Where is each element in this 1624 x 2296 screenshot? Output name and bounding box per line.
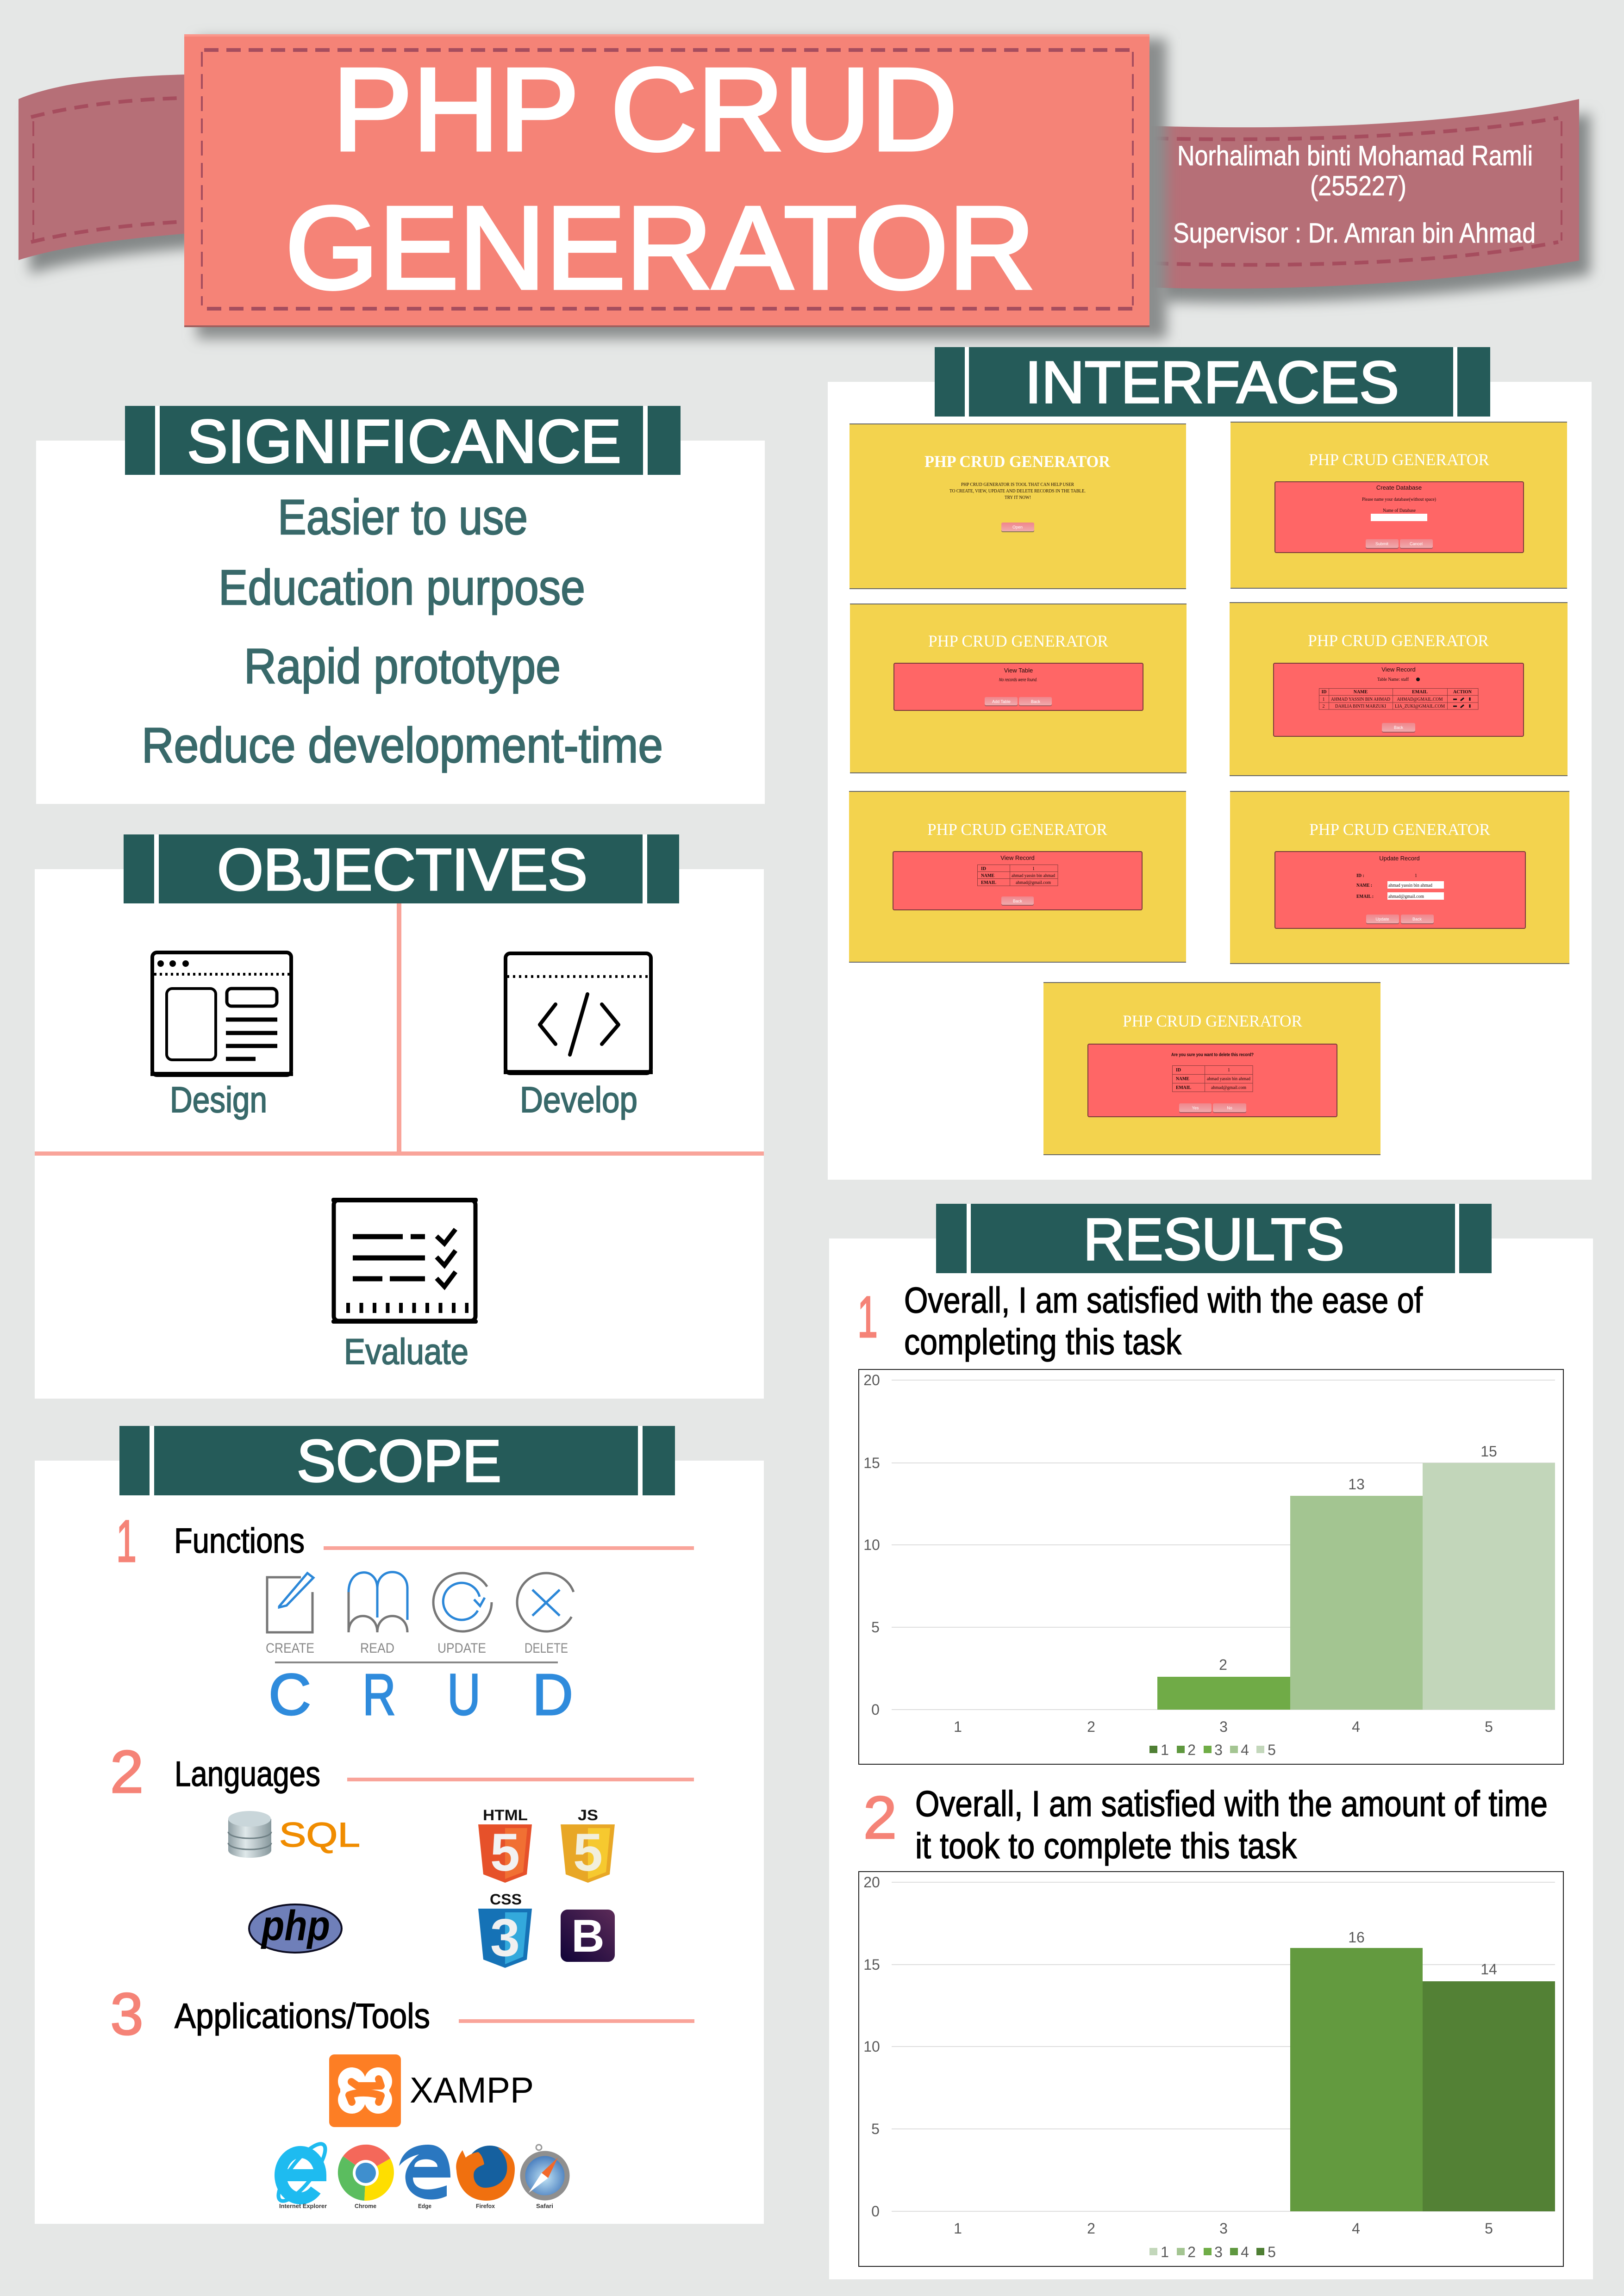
crud letters: U — [447, 1662, 481, 1727]
bar chart 1: 10 — [863, 1537, 880, 1553]
screen: home — [849, 424, 1186, 589]
crud letters: C — [269, 1662, 311, 1727]
screen: view table: No records were found. — [999, 678, 1037, 683]
bar chart 2: 1 — [954, 2220, 962, 2237]
heading: significance: SIGNIFICANCE — [187, 407, 621, 475]
screen: view table: Add Table — [992, 699, 1011, 704]
panel: interfaces — [828, 347, 1592, 1180]
crud letters — [269, 1661, 573, 1727]
screen: create database — [1230, 422, 1567, 588]
screen: create database: Create Database — [1376, 484, 1422, 491]
significance list: Reduce development-time — [142, 717, 663, 773]
logo: php: php — [260, 1902, 330, 1949]
logo: firefox — [456, 2146, 515, 2209]
logo: bootstrap: B — [571, 1910, 605, 1961]
logo: javascript: JS — [578, 1807, 598, 1823]
panel: scope — [35, 1426, 764, 2224]
label: design: Design — [170, 1079, 267, 1120]
chart 2 legend: 2 — [1187, 2244, 1196, 2260]
chart 1 legend: 3 — [1214, 1742, 1223, 1758]
bar chart 2: 2 — [1087, 2220, 1095, 2237]
logo: html5: HTML — [483, 1807, 528, 1823]
scope item 1: functions: 1 — [116, 1508, 137, 1574]
logo: css3: CSS — [490, 1891, 522, 1908]
logo: safari: Safari — [536, 2203, 553, 2209]
screen: update record: ahmad yassin bin ahmad — [1388, 883, 1432, 888]
chart 1 legend: 5 — [1268, 1742, 1276, 1758]
bar chart 1: 5 — [1485, 1718, 1493, 1735]
label: evaluate: Evaluate — [344, 1331, 468, 1372]
chart 2 legend: 1 — [1161, 2244, 1169, 2260]
screen: view records table: Back — [1394, 725, 1404, 730]
screen: delete record: 1 — [1228, 1068, 1230, 1073]
bar chart 1: 13 — [1348, 1476, 1365, 1493]
logo: sql — [228, 1811, 360, 1858]
bar chart 1: 2 — [1087, 1718, 1095, 1735]
icon: evaluate — [331, 1198, 478, 1324]
heading: scope — [119, 1426, 675, 1495]
chart 2 legend: 4 — [1241, 2244, 1249, 2260]
scope item 1: functions — [116, 1508, 694, 1574]
screen: view single record: ahmad@gmail.com — [1016, 880, 1051, 885]
bar chart 2: 10 — [863, 2038, 880, 2055]
significance list: Easier to use — [278, 489, 528, 545]
chart 1 legend: 1 — [1161, 1742, 1169, 1758]
icon: delete — [506, 1562, 586, 1656]
screen: update record: Update Record — [1379, 855, 1420, 862]
chart 1 legend: 4 — [1241, 1742, 1249, 1758]
heading: objectives — [124, 834, 679, 903]
screen: update record: 1 — [1415, 873, 1417, 878]
logo: javascript: 5 — [573, 1823, 603, 1882]
icon: update — [433, 1573, 492, 1656]
screen: view records table: ACTION — [1453, 690, 1472, 695]
logo: internet explorer: Internet Explorer — [279, 2203, 327, 2209]
title banner — [184, 34, 1149, 327]
screen: home: Open — [1012, 525, 1023, 529]
scope item 3: applications and tools: 3 — [110, 1981, 144, 2047]
screen: update record: Update — [1375, 917, 1389, 921]
question 2: 2 — [863, 1784, 897, 1851]
screen: update record: NAME : — [1356, 883, 1372, 888]
screen: delete record: Yes — [1192, 1106, 1199, 1110]
question 2: it took to complete this task — [915, 1825, 1297, 1866]
icon: design — [150, 952, 293, 1076]
bar chart 2: 5 — [1485, 2220, 1493, 2237]
question 1: 1 — [857, 1284, 878, 1350]
bar chart 1: 4 — [1352, 1718, 1360, 1735]
icon: delete: DELETE — [525, 1641, 568, 1656]
screen: view records table: NAME — [1354, 690, 1368, 695]
screen: view single record: ahmad yassin bin ahmad — [1012, 873, 1055, 878]
screen: update record — [1230, 791, 1569, 964]
scope item 3: applications and tools — [110, 1981, 694, 2047]
scope item 1: functions: Functions — [174, 1521, 305, 1561]
screen: view records table: AHMAD YASSIN BIN AHMAD — [1331, 697, 1390, 702]
logo: html5: 5 — [490, 1823, 520, 1882]
logo: css3 — [478, 1891, 532, 1968]
title text: PHP CRUD — [332, 44, 957, 175]
logo: html5 — [478, 1807, 532, 1883]
heading: results — [936, 1204, 1492, 1273]
chart 2 legend — [1149, 2244, 1276, 2260]
screen: delete record: Are you sure you want to delete this record? — [1171, 1052, 1254, 1058]
screen: home: TO CREATE, VIEW, UPDATE AND DELETE RECORDS IN THE TABLE. — [949, 488, 1086, 494]
ribbon shadows — [30, 88, 1590, 303]
bar chart 1: 20 — [863, 1372, 880, 1388]
question 1 — [857, 1280, 1423, 1362]
bar chart 2 — [859, 1872, 1563, 2266]
bar chart 2: 3 — [1219, 2220, 1228, 2237]
screen: view records table: 2 — [1322, 704, 1325, 709]
bar chart 1 — [859, 1369, 1563, 1764]
bar chart 1: 5 — [871, 1619, 880, 1636]
chart 2 legend: 5 — [1268, 2244, 1276, 2260]
screen: view records table — [1230, 603, 1568, 776]
scope item 2: languages: Languages — [175, 1755, 320, 1794]
screen: view single record — [849, 791, 1186, 962]
screen: delete record — [1043, 983, 1380, 1155]
logo: css3: 3 — [490, 1908, 520, 1967]
screen: create database: PHP CRUD GENERATOR — [1309, 450, 1489, 469]
logo: safari — [523, 2145, 567, 2209]
screen: view single record: NAME — [981, 873, 994, 878]
screen: create database: Please name your database(without space) — [1362, 497, 1436, 502]
right ribbon with author details — [1149, 99, 1579, 289]
screen: create database: Submit — [1375, 541, 1389, 546]
logo: internet explorer — [271, 2138, 332, 2209]
logo: edge — [399, 2145, 450, 2209]
screen: home: TRY IT NOW! — [1005, 495, 1031, 500]
bar chart 1: 1 — [954, 1718, 962, 1735]
screen: home: PHP CRUD GENERATOR IS TOOL THAT CAN HELP USER — [961, 482, 1074, 487]
logo: chrome: Chrome — [355, 2203, 376, 2209]
bar chart 1: 3 — [1219, 1718, 1228, 1735]
panel: objectives — [35, 834, 764, 1399]
scope item 3: applications and tools: Applications/Tools — [175, 1997, 430, 2036]
bar chart 2: 4 — [1352, 2220, 1360, 2237]
icon: read: READ — [360, 1641, 394, 1656]
screen: delete record: EMAIL — [1176, 1085, 1191, 1090]
screen: view records table: PHP CRUD GENERATOR — [1308, 631, 1489, 650]
logo: bootstrap — [561, 1910, 615, 1962]
screen: view records table: View Record — [1381, 666, 1416, 673]
question 1: Overall, I am satisfied with the ease of — [904, 1280, 1423, 1320]
icon: update: UPDATE — [437, 1641, 486, 1656]
screen: home: PHP CRUD GENERATOR — [924, 452, 1111, 471]
screen: delete record: ID — [1176, 1068, 1181, 1073]
bar chart 2: 5 — [871, 2121, 880, 2137]
banner shadow — [197, 39, 1167, 339]
screen: update record: EMAIL : — [1356, 894, 1374, 899]
screen: delete record: ahmad@gmail.com — [1211, 1085, 1246, 1090]
icon: create: CREATE — [266, 1641, 314, 1656]
bar chart 2: 14 — [1480, 1961, 1497, 1978]
screen: view single record: EMAIL — [981, 880, 996, 885]
bar chart 1: 2 — [1219, 1656, 1227, 1673]
screen: delete record: No — [1227, 1106, 1232, 1110]
logo: firefox: Firefox — [476, 2203, 495, 2209]
chart 1 legend: 2 — [1187, 1742, 1196, 1758]
screen: view table: Back — [1031, 699, 1041, 704]
bar chart 1: 15 — [863, 1455, 880, 1471]
screen: view single record: 1 — [1032, 866, 1035, 871]
question 2: Overall, I am satisfied with the amount of time — [915, 1783, 1548, 1824]
screen: view single record: ID — [981, 866, 986, 871]
chart 2 legend: 3 — [1214, 2244, 1223, 2260]
screen: view records table: DAHLIA BINTI MARZUKI — [1335, 704, 1386, 709]
label: develop: Develop — [520, 1079, 637, 1120]
logo: edge: Edge — [418, 2203, 431, 2209]
icon: read — [349, 1572, 407, 1656]
screen: update record: ID : — [1356, 873, 1364, 878]
crud letters: R — [362, 1662, 396, 1727]
right ribbon with author details: (255227) — [1310, 170, 1406, 201]
title text: GENERATOR — [285, 182, 1035, 313]
logo: xampp: XAMPP — [410, 2070, 534, 2110]
logo: sql: SQL — [279, 1816, 360, 1854]
screen: view records table: 1 — [1322, 697, 1325, 702]
bar chart 1: 0 — [871, 1701, 880, 1718]
heading: scope: SCOPE — [297, 1428, 501, 1494]
screen: delete record: NAME — [1176, 1076, 1189, 1082]
bar chart 1: 15 — [1480, 1443, 1497, 1460]
screen: view records table: Table Name: staff — [1377, 677, 1409, 682]
icon: develop — [504, 953, 653, 1074]
significance list: Rapid prototype — [244, 638, 561, 694]
icon: create — [266, 1573, 314, 1656]
screen: view single record: View Record — [1000, 854, 1035, 861]
screen: delete record: ahmad yassin bin ahmad — [1207, 1076, 1250, 1082]
panel: results — [829, 1204, 1593, 2279]
screen: view table: PHP CRUD GENERATOR — [928, 632, 1108, 650]
chart 1 legend — [1149, 1742, 1276, 1758]
right ribbon with author details: Supervisor : Dr. Amran bin Ahmad — [1173, 218, 1536, 249]
title text — [285, 44, 1035, 313]
right ribbon with author details: Norhalimah binti Mohamad Ramli — [1177, 140, 1533, 171]
heading: results: RESULTS — [1083, 1207, 1344, 1273]
question 2 — [863, 1783, 1548, 1866]
panel: significance — [36, 406, 765, 804]
crud letters: D — [532, 1662, 573, 1727]
heading: objectives: OBJECTIVES — [217, 837, 587, 903]
screen: create database: Name of Database — [1383, 508, 1416, 513]
screen: update record: PHP CRUD GENERATOR — [1309, 820, 1490, 839]
left ribbon — [19, 75, 184, 260]
bar chart 2: 16 — [1348, 1929, 1365, 1946]
heading: interfaces: INTERFACES — [1025, 349, 1399, 416]
screen: view records table: EMAIL — [1412, 690, 1428, 695]
scope item 2: languages: 2 — [110, 1738, 144, 1805]
screen: view single record: PHP CRUD GENERATOR — [927, 820, 1107, 839]
heading: interfaces — [935, 347, 1490, 417]
significance list — [142, 489, 663, 773]
screen: view records table: ID — [1321, 690, 1327, 695]
screen: view records table: LIA_ZUKI@GMAIL.COM — [1395, 704, 1445, 709]
screen: update record: ahmad@gmail.com — [1388, 894, 1424, 899]
bar chart 2: 15 — [863, 1956, 880, 1973]
question 1: completing this task — [904, 1321, 1182, 1362]
screen: view table — [850, 604, 1187, 773]
logo: javascript — [561, 1807, 615, 1883]
logo: chrome — [338, 2145, 394, 2209]
screen: update record: Back — [1412, 917, 1422, 921]
logo: xampp — [329, 2054, 534, 2127]
bar chart 2: 20 — [863, 1874, 880, 1891]
significance list: Education purpose — [219, 560, 585, 615]
scope item 2: languages — [110, 1738, 694, 1805]
screen: view records table: AHMAD@GMAIL.COM — [1397, 697, 1443, 702]
bar chart 2: 0 — [871, 2203, 880, 2220]
screen: view single record: Back — [1013, 899, 1023, 903]
screen: delete record: PHP CRUD GENERATOR — [1123, 1012, 1302, 1030]
screen: create database: Cancel — [1410, 541, 1423, 546]
screen: view table: View Table — [1004, 667, 1033, 674]
